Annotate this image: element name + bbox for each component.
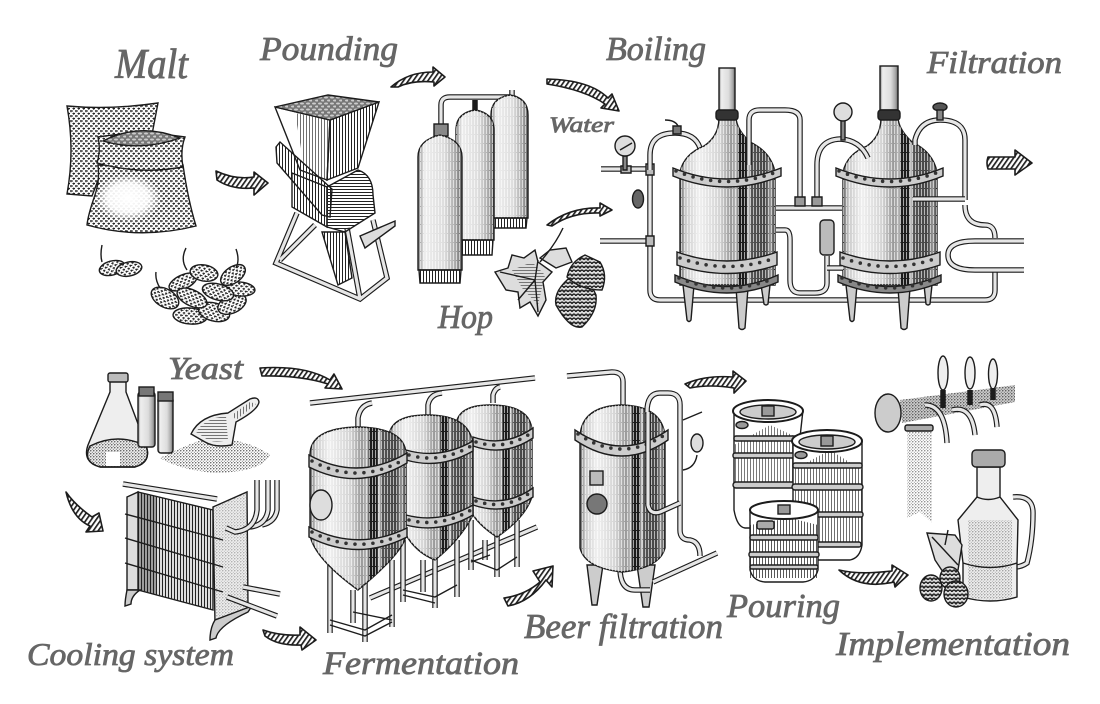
vials [138,392,155,447]
end cap [875,394,901,432]
arrow: hop to boiling [547,203,612,226]
feet [125,590,140,606]
arrow: yeast to fermentation [260,368,342,389]
tie rods [125,514,223,592]
heading: Cooling system: Cooling system [27,636,234,672]
column [907,430,932,523]
grain pile [148,260,256,325]
base pipe [653,553,717,582]
cylinder 2 [456,110,494,240]
upper pipes [262,480,277,525]
heading: Hop: Hop [437,299,493,336]
label: Water: Water [549,112,615,137]
tap handles [938,356,998,390]
connecting pipes [749,110,800,200]
keg 2 [792,430,863,560]
heading: Fermentation: Fermentation [322,646,519,682]
illustration: hop leaf and cones [495,228,605,327]
illustration: malt sacks and grains [67,103,256,325]
bottom pipe [370,527,537,598]
jug handle [1010,497,1033,567]
legs [587,565,603,605]
pipe tee fittings [621,164,654,246]
top bar [123,484,217,499]
tube [900,385,1015,423]
illustration: fermentation tanks [309,378,537,642]
column collar [905,425,933,431]
top pipe [310,378,535,403]
side pipes [647,393,700,556]
hatch plate [590,471,603,485]
arrow: to kegs [685,371,746,393]
illustration: plate cooling system [123,480,280,640]
right arc pipes [915,120,965,200]
valve wheel [632,190,644,208]
heading: Filtration: Filtration [926,44,1062,80]
filter cylinder [820,220,834,255]
drop pipes [358,387,500,432]
front plate [213,492,248,623]
arrow: down to cooling system [66,492,103,532]
left arc pipe [650,133,700,170]
tank 1 [673,110,781,293]
tank B [389,415,473,560]
housing [327,170,375,232]
chute board [276,142,332,217]
hop leaf [927,533,962,575]
hop stem [540,228,563,262]
back sack [67,103,158,196]
lower pipes [227,587,280,616]
arrow: to filtration [987,150,1032,175]
inlet pipes [600,169,652,241]
heading: Yeast: Yeast [168,350,244,386]
stacks [719,68,735,112]
heading: Beer filtration: Beer filtration [524,607,723,646]
illustration: beer tap [875,356,1015,523]
small grains [98,245,143,279]
tank legs [683,285,932,330]
tank B legs [403,540,457,608]
illustration: glass jug and hops [920,450,1033,607]
tank A legs [330,560,392,642]
right top valve [933,103,947,111]
machine frame and legs [276,213,387,299]
connecting pipes [441,90,512,130]
yeast pile [160,437,270,473]
crank handle [360,221,395,248]
arrow: cooling to fermentation [263,627,316,650]
plates [138,492,213,610]
illustration: beer kegs [733,400,863,582]
jug body [958,467,1018,601]
flask [86,378,148,467]
illustration: yeast flask, vials and scoop [86,373,270,473]
cylinder 1 [434,124,448,136]
bottom main pipe [650,170,995,300]
front sack body [87,165,196,233]
arrow: to implementation [839,565,908,587]
porthole [310,490,332,520]
hopper [275,107,330,180]
vessel [580,405,665,572]
hop cones [920,567,968,607]
gauge [691,434,703,452]
heading: Pounding: Pounding [259,31,398,68]
back plate [127,492,138,590]
hop cones [556,275,596,327]
faucets [925,388,997,443]
scoop [191,398,259,446]
heading: Malt: Malt [114,42,189,88]
top pipe [567,372,623,408]
heading: Pouring: Pouring [726,588,840,625]
illustration: boiling system [600,66,1024,330]
keg 1 [733,400,803,528]
arrow: pounding to hop tanks [391,67,445,87]
tank C [456,405,533,537]
heading: Boiling: Boiling [606,31,706,68]
cylinder 3 [491,95,528,218]
tank 2 [836,110,943,293]
illustration: beer filter tank [567,372,717,607]
illustration: grinding machine [275,95,395,299]
left pressure gauge [615,136,635,170]
front sack neck with grain [97,134,185,170]
jug cap [972,450,1005,467]
illustration: hop gas cylinders [418,90,528,283]
arrow: to beer filtration [504,566,553,606]
porthole [587,494,607,514]
arrow: water to boiling [547,79,619,111]
hop leaves [495,250,552,316]
tank C legs [471,520,517,577]
centre gauge [834,103,852,140]
heading: Implementation: Implementation [835,626,1070,663]
keg 3 [749,501,819,582]
arrow: malt to pounding [216,171,268,195]
tank A [309,427,407,590]
